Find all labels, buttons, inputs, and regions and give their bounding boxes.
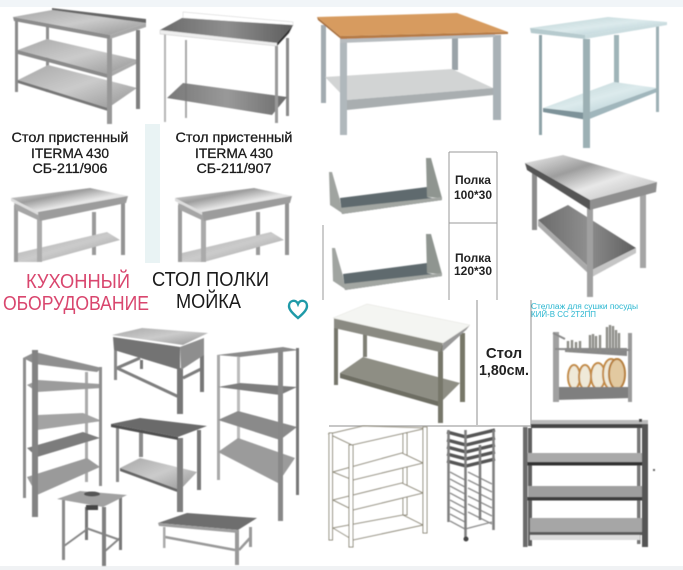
shelf table frame xyxy=(323,152,497,300)
table: lower left xyxy=(11,188,128,262)
shelving: left rack xyxy=(23,350,102,517)
wall shelf 120x30 xyxy=(332,234,442,290)
table: wall table with two shelves xyxy=(13,8,146,124)
caption: table 906: Стол пристенный xyxy=(12,129,128,145)
label: shelf 100x30: 100*30 xyxy=(454,188,492,202)
heading: table shelves sink xyxy=(152,269,269,313)
caption: table 907: Стол пристенный xyxy=(176,129,292,145)
table: wall table with one shelf xyxy=(160,12,293,123)
dish drying rack xyxy=(553,325,632,402)
low table xyxy=(158,513,257,565)
heading: table shelves sink: МОЙКА xyxy=(176,289,242,313)
label: shelf 120x30 xyxy=(454,251,492,278)
heading: table shelves sink: СТОЛ ПОЛКИ xyxy=(152,269,269,291)
caption: table 907: ITERMA 430 xyxy=(195,145,273,161)
table: white top xyxy=(333,304,470,423)
table: wood top xyxy=(317,13,508,135)
label: dish drying rack xyxy=(531,302,638,319)
label: table 1.80 xyxy=(479,345,529,379)
label: shelf 100x30 xyxy=(454,173,492,202)
waste bin table xyxy=(57,491,127,566)
caption: table 907 xyxy=(176,129,292,176)
table: blue steel xyxy=(530,17,667,148)
grid lines xyxy=(329,300,647,426)
caption: table 906: СБ-211/906 xyxy=(32,160,108,176)
label: dish drying rack: Стеллаж для сушки посуды xyxy=(531,302,638,311)
work table xyxy=(111,418,207,512)
label: shelf 120x30: 120*30 xyxy=(454,264,492,278)
wall shelf 100x30 xyxy=(329,158,442,214)
label: table 1.80: 1,80см. xyxy=(479,362,529,379)
divider xyxy=(145,124,160,263)
table: lower right xyxy=(175,188,292,262)
label: table 1.80: Стол xyxy=(486,345,522,362)
heading: kitchen equipment: ОБОРУДОВАНИЕ xyxy=(3,293,149,315)
caption: table 906: ITERMA 430 xyxy=(31,145,109,161)
sink table xyxy=(112,328,208,414)
heading: kitchen equipment xyxy=(3,269,149,315)
shelving: right rack xyxy=(217,347,299,521)
large steel shelving xyxy=(523,419,655,547)
icon: heart xyxy=(289,301,307,318)
caption: table 906 xyxy=(12,129,128,176)
table: mirror steel xyxy=(525,155,657,297)
caption: table 907: СБ-211/907 xyxy=(196,160,272,176)
tray trolley xyxy=(447,430,495,542)
heading: kitchen equipment: КУХОННЫЙ xyxy=(26,269,130,293)
label: shelf 100x30: Полка xyxy=(455,173,491,187)
label: dish drying rack: КИЙ-В СС 2Т2ПП xyxy=(531,310,596,319)
wireframe shelving xyxy=(329,426,427,547)
label: shelf 120x30: Полка xyxy=(455,251,491,265)
